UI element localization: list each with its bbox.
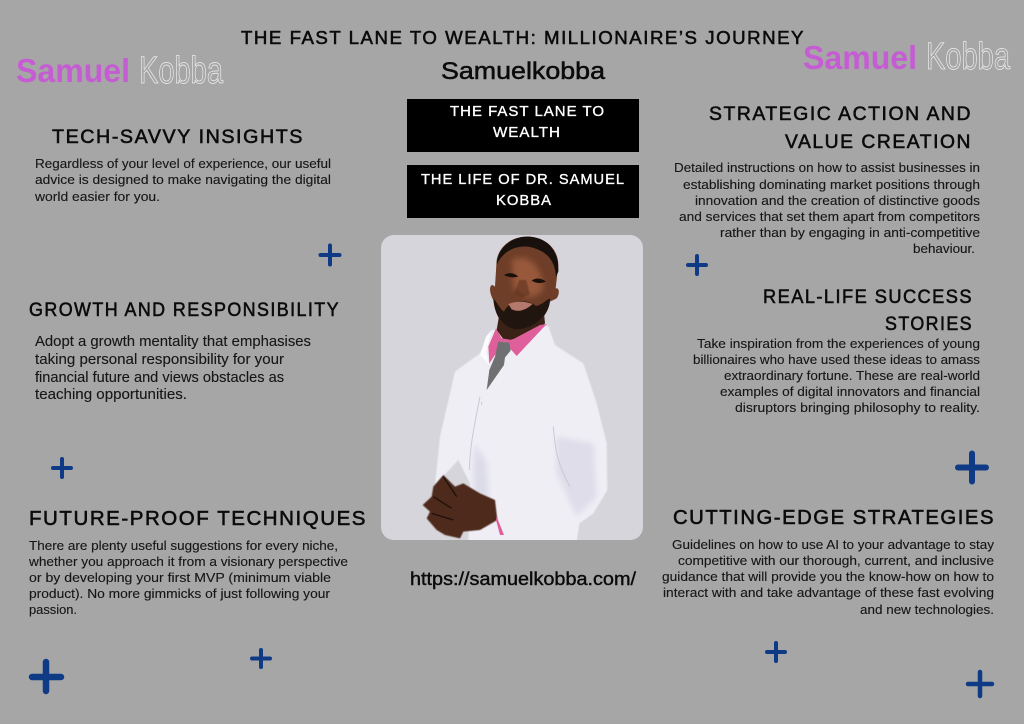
tie	[487, 342, 511, 390]
panel: real-life success stories	[693, 287, 981, 415]
white coat collar	[480, 330, 492, 365]
banner: the life of dr. samuel kobba	[407, 165, 639, 218]
body text: billionaires who have used these ideas to amass	[693, 352, 981, 367]
body text: rather than by engaging in anti-competitive	[720, 225, 980, 240]
body text: whether you approach it from a visionary perspective	[28, 554, 348, 569]
logo: top left: Samuel	[16, 52, 130, 89]
body text: There are plenty useful suggestions for every niche,	[29, 538, 338, 553]
body text: behaviour.	[913, 241, 975, 256]
head	[490, 237, 559, 329]
body text	[674, 160, 981, 256]
icon: plus 2	[688, 256, 706, 274]
photo: portrait in white coat	[381, 235, 643, 542]
icon: plus 1	[320, 246, 340, 264]
panel: growth and responsibility	[29, 300, 340, 403]
logo: top left: Kobba	[139, 50, 224, 92]
beard	[493, 298, 550, 329]
body text: advice is designed to make navigating the digital	[35, 172, 331, 187]
heading: GROWTH AND RESPONSIBILITY	[29, 300, 340, 321]
eyes	[504, 273, 546, 283]
body text: passion.	[29, 602, 77, 617]
logo: top left	[16, 50, 224, 92]
nose	[514, 280, 530, 298]
heading: STORIES	[885, 314, 973, 335]
body text	[662, 537, 995, 617]
panel: tech-savvy insights	[34, 127, 331, 204]
heading	[763, 287, 973, 335]
body text: disruptors bringing philosophy to reality.	[735, 400, 980, 415]
panel: future-proof techniques	[28, 508, 367, 617]
body text: Detailed instructions on how to assist businesses in	[674, 160, 980, 175]
title: THE FAST LANE TO WEALTH: MILLIONAIRE’S JOURNEY	[241, 27, 805, 48]
body text: establishing dominating market positions through	[683, 177, 980, 192]
body text	[693, 336, 981, 415]
panel: strategic action and value creation	[674, 104, 981, 256]
body text: or by developing your first MVP (minimum viable	[29, 570, 331, 585]
subtitle: Samuelkobba: Samuelkobba	[441, 58, 606, 85]
body text: interact with and take advantage of these fast evolving	[663, 585, 994, 600]
face highlight	[512, 258, 543, 297]
body text: Regardless of your level of experience, our useful	[35, 156, 331, 171]
body text: Adopt a growth mentality that emphasises	[35, 334, 311, 350]
body text: Guidelines on how to use AI to your advantage to stay	[672, 537, 995, 552]
body text: financial future and views obstacles as	[35, 370, 284, 386]
body text: teaching opportunities.	[35, 387, 187, 403]
heading: VALUE CREATION	[785, 132, 972, 153]
hands	[423, 475, 497, 538]
body text: competitive with our thorough, current, and inclusive	[678, 553, 994, 568]
logo: top right	[803, 36, 1011, 78]
icon: plus 8	[968, 672, 992, 696]
body text	[28, 538, 348, 617]
heading: REAL-LIFE SUCCESS	[763, 287, 973, 308]
body text: and services that set them apart from competitors	[679, 209, 981, 224]
icon: plus 6	[252, 650, 270, 667]
body text: Take inspiration from the experiences of young	[697, 336, 980, 351]
panel: cutting-edge strategies	[662, 507, 995, 617]
body text: examples of digital innovators and financial	[720, 384, 980, 399]
banner: the fast lane to wealth: WEALTH	[493, 124, 561, 141]
icon: plus 3	[53, 459, 71, 477]
heading: STRATEGIC ACTION AND	[709, 104, 972, 125]
hair	[497, 237, 558, 277]
logo: top right: Samuel	[803, 39, 917, 76]
banner: the life of dr. samuel kobba: THE LIFE OF DR. SAMUEL	[421, 171, 625, 188]
icon: plus 7	[767, 643, 785, 661]
body text: taking personal responsibility for your	[35, 352, 284, 368]
mouth	[508, 302, 533, 311]
neck	[496, 316, 545, 340]
shirt cuff	[496, 517, 504, 535]
website link: https://samuelkobba.com/	[410, 569, 636, 589]
body text: product). No more gimmicks of just following your	[29, 586, 331, 601]
body text	[35, 334, 311, 403]
body text: innovation and the creation of distinctive goods	[695, 193, 981, 208]
heading: FUTURE-PROOF TECHNIQUES	[29, 508, 367, 530]
pink shirt collar	[488, 324, 547, 363]
icon: plus 5	[32, 662, 61, 691]
banner: the life of dr. samuel kobba: KOBBA	[496, 192, 552, 209]
body text: extraordinary fortune. These are real-world	[724, 368, 980, 383]
body text	[34, 156, 331, 204]
body text: and new technologies.	[860, 602, 994, 617]
icon: plus 4	[958, 454, 986, 482]
body text: world easier for you.	[34, 189, 160, 204]
banner: the fast lane to wealth	[407, 99, 639, 152]
body text: guidance that will provide you the know-how on how to	[662, 569, 994, 584]
heading	[709, 104, 972, 153]
coat shading	[557, 437, 597, 517]
heading: TECH-SAVVY INSIGHTS	[52, 127, 304, 148]
banner: the fast lane to wealth: THE FAST LANE TO	[450, 103, 605, 120]
coat seams	[469, 397, 570, 487]
coat	[435, 326, 607, 542]
heading: CUTTING-EDGE STRATEGIES	[673, 507, 995, 529]
